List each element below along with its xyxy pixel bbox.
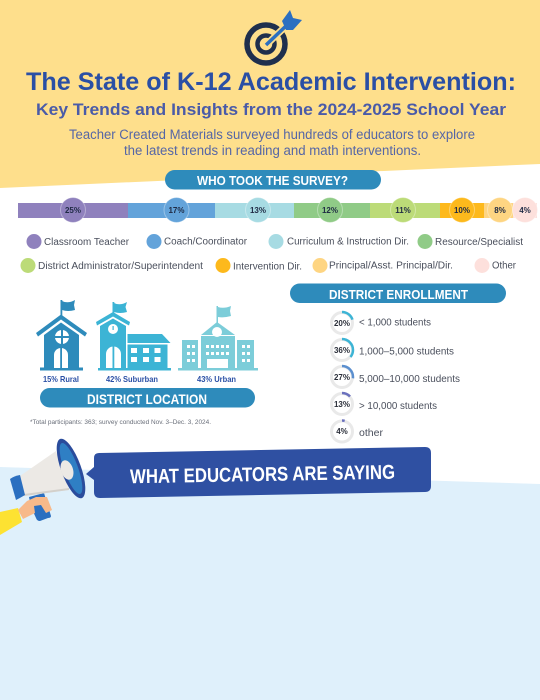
heading: district location: [40, 388, 255, 408]
chart: enrollment rings: 20%: [334, 319, 350, 328]
legend: respondent roles: Resource/Specialist: [435, 237, 523, 248]
chart: respondent role stacked bar: 11%: [395, 206, 411, 215]
chart: respondent role stacked bar: 12%: [322, 206, 338, 215]
enrollment labels: < 1,000 students: [359, 318, 431, 328]
chart: respondent role stacked bar: 4%: [519, 206, 531, 215]
legend: respondent roles: Coach/Coordinator: [164, 236, 248, 248]
heading: district location: DISTRICT LOCATION: [87, 391, 207, 407]
chart: enrollment rings: [331, 312, 353, 442]
subtitle: Key Trends and Insights from the 2024-2025 School Year: [36, 100, 506, 119]
heading: who took the survey: WHO TOOK THE SURVEY?: [197, 174, 348, 188]
footnote: *Total participants: 363; survey conducted Nov. 3–Dec. 3, 2024.: [30, 419, 211, 426]
legend: respondent roles: Classroom Teacher: [44, 237, 130, 248]
legend: respondent roles: [20, 234, 523, 273]
legend: respondent roles: District Administrator/Superintendent: [38, 261, 203, 272]
chart: respondent role stacked bar: 8%: [494, 206, 506, 215]
enrollment labels: 1,000–5,000 students: [359, 346, 454, 358]
location labels: 43% Urban: [197, 374, 236, 384]
enrollment labels: > 10,000 students: [359, 401, 437, 412]
heading: district enrollment: [290, 284, 506, 303]
legend: respondent roles: Principal/Asst. Principal/Dir.: [329, 260, 453, 272]
chart: respondent role stacked bar: 17%: [168, 206, 185, 215]
chart: enrollment rings: 4%: [336, 427, 348, 436]
enrollment labels: [359, 318, 460, 439]
intro text: Teacher Created Materials surveyed hundreds of educators to explore: [69, 127, 475, 142]
panel: yellow header background: [0, 0, 540, 188]
chart: respondent role stacked bar: 10%: [454, 206, 470, 215]
heading: district enrollment: DISTRICT ENROLLMENT: [329, 287, 468, 302]
chart: enrollment rings: 13%: [334, 400, 350, 409]
chart: respondent role stacked bar: 13%: [250, 206, 266, 215]
legend: respondent roles: Intervention Dir.: [233, 262, 302, 272]
intro text: [69, 127, 475, 158]
location labels: [43, 374, 236, 384]
location labels: 15% Rural: [43, 374, 79, 384]
chart: enrollment rings: 36%: [334, 346, 350, 355]
callout: what educators are saying: [86, 447, 431, 498]
title: The State of K-12 Academic Intervention:: [26, 68, 516, 96]
enrollment labels: other: [359, 428, 384, 439]
legend: respondent roles: Other: [492, 260, 517, 272]
icon: urban school: [178, 306, 258, 370]
icon: megaphone and hand: [0, 435, 91, 535]
callout: what educators are saying: WHAT EDUCATORS ARE SAYING: [130, 462, 395, 488]
icon: target with arrow: [247, 10, 302, 63]
chart: respondent role stacked bar: [18, 198, 538, 222]
intro text: the latest trends in reading and math interventions.: [124, 143, 421, 158]
enrollment labels: 5,000–10,000 students: [359, 374, 460, 385]
icon: suburban school: [96, 302, 171, 370]
chart: respondent role stacked bar: 25%: [65, 206, 81, 215]
panel: light blue lower background: [0, 467, 540, 700]
heading: who took the survey: [165, 170, 381, 190]
chart: enrollment rings: 27%: [334, 373, 350, 382]
location labels: 42% Suburban: [106, 374, 158, 384]
icon: rural school: [36, 300, 87, 370]
legend: respondent roles: Curriculum & Instruction Dir.: [287, 236, 409, 248]
